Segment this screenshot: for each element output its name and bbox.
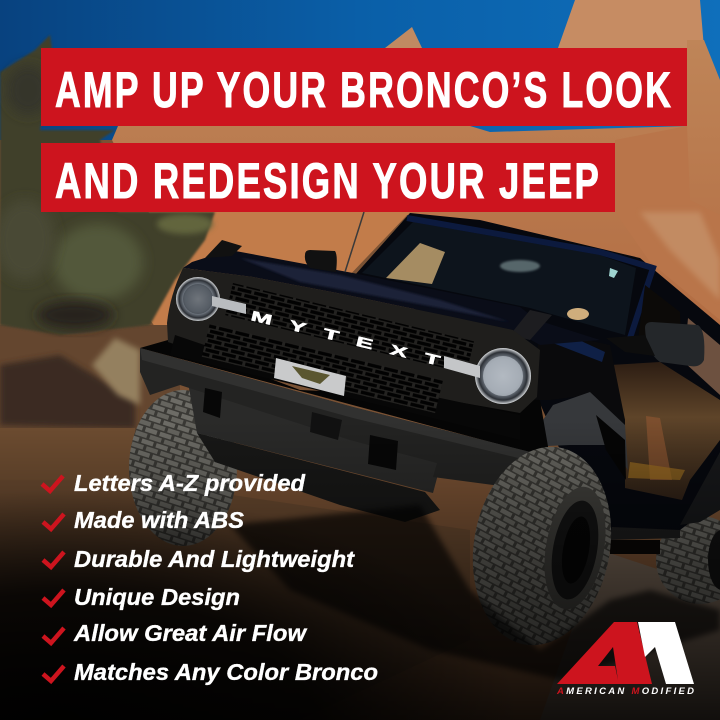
front right tire — [458, 436, 626, 656]
bottom dark gradient — [0, 420, 720, 720]
rear fender — [680, 452, 720, 525]
body flank — [530, 330, 625, 470]
door with canyon reflection — [610, 362, 720, 500]
dark corner behind the feature list — [0, 460, 520, 720]
antenna — [345, 212, 364, 272]
lower bumper — [140, 348, 550, 522]
feature: air flow: Allow Great Air Flow — [73, 620, 308, 646]
ground shadow under the truck — [230, 505, 720, 680]
feature: any color: Matches Any Color Bronco — [74, 659, 378, 685]
MYTEXT grille lettering: MYTEXT — [249, 308, 442, 369]
rear tire — [656, 516, 720, 604]
feature: durable: Durable And Lightweight — [74, 546, 355, 572]
feature: letters: Letters A-Z provided — [74, 470, 306, 496]
feature: unique: Unique Design — [74, 584, 240, 610]
hood — [183, 240, 600, 345]
wheel arch fender — [525, 392, 628, 470]
license plate — [274, 358, 346, 396]
side windows — [638, 285, 720, 395]
underbody — [610, 540, 660, 554]
headlight right — [444, 348, 531, 404]
grille panel and dark lower band — [140, 268, 550, 458]
side mirrors — [305, 250, 704, 366]
feature: ABS: Made with ABS — [74, 507, 245, 533]
windshield frame — [407, 218, 653, 338]
logo: American Modified: AMERICAN MODIFIED — [556, 686, 694, 697]
sill — [610, 527, 680, 540]
headline banner 1 — [41, 48, 687, 126]
front left tire — [129, 390, 237, 546]
truck: black Ford Bronco with MYTEXT grille — [129, 212, 720, 656]
ground and rocks on the left — [0, 325, 180, 498]
grille mesh — [202, 280, 474, 418]
logo: American Modified — [556, 622, 694, 697]
headline banner 2 — [41, 143, 615, 212]
headlight left — [176, 277, 246, 321]
trees on the left — [0, 35, 215, 335]
feature list — [42, 470, 378, 685]
road — [0, 480, 720, 720]
cab silhouette — [355, 213, 720, 540]
windshield — [362, 222, 636, 335]
